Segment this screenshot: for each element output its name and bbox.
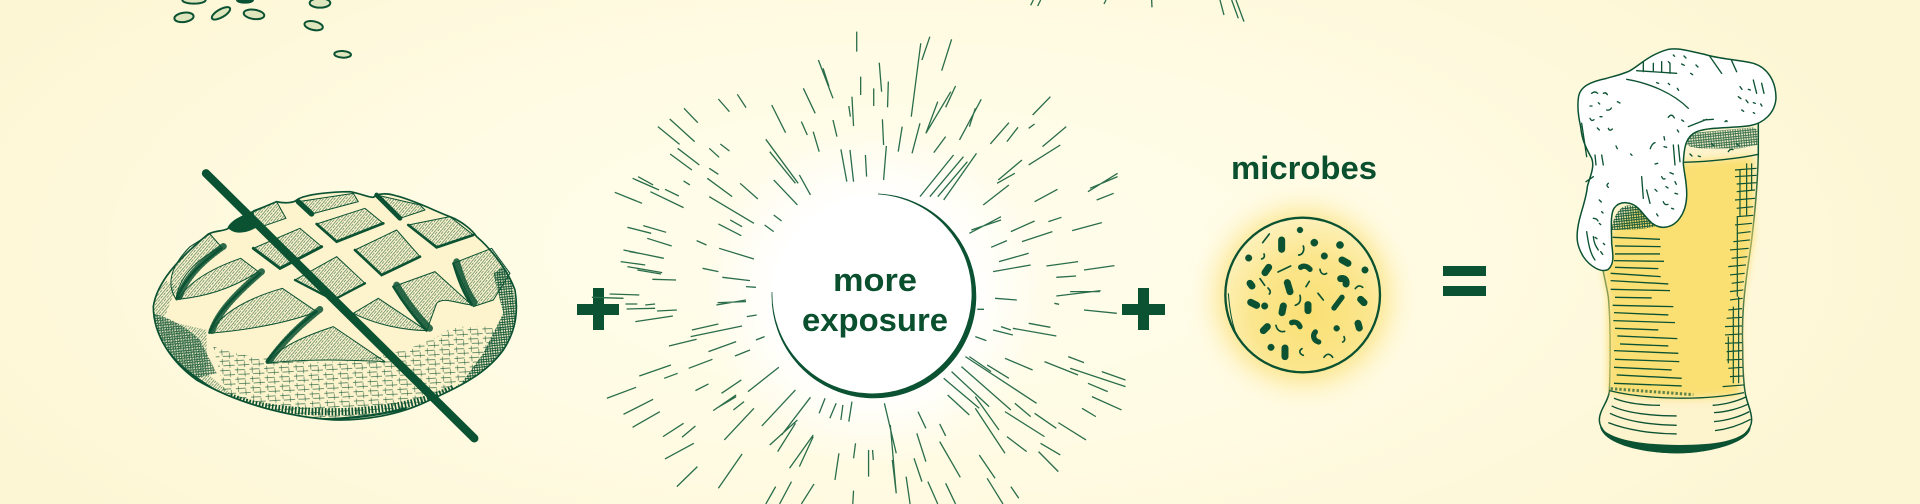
glow behind exposure circle — [704, 126, 1044, 466]
microbe shapes — [1245, 227, 1368, 357]
glass foot shadow — [1600, 427, 1751, 453]
label: more: more — [833, 262, 917, 298]
beer foam — [1577, 49, 1776, 270]
label: exposure: exposure — [802, 302, 948, 338]
right liquid hatch — [1723, 163, 1757, 387]
scored crust panels — [171, 193, 510, 363]
beer liquid — [1603, 157, 1753, 398]
glass body — [1599, 120, 1758, 453]
exposure circle — [772, 194, 976, 398]
glass base lines — [1608, 397, 1751, 434]
loaf shading — [150, 263, 520, 423]
foam cavity hatch — [1612, 205, 1655, 230]
loaf body — [153, 192, 516, 420]
plus sign 2 — [1122, 288, 1165, 330]
upper rim hatch — [1687, 127, 1757, 149]
icon: microbes dish — [1225, 218, 1380, 372]
dark scored edges — [177, 195, 475, 362]
grain seeds — [174, 0, 351, 58]
icon: crossed-out bread loaf — [150, 173, 520, 438]
sunburst rays — [592, 32, 1126, 504]
glow behind microbes dish — [1217, 211, 1389, 383]
slash line — [206, 173, 474, 438]
equals sign — [1443, 266, 1486, 296]
left liquid hatch — [1611, 237, 1682, 386]
heading: microbes: microbes — [1231, 150, 1377, 186]
top rays cut off from previous section — [1031, 0, 1244, 22]
plus sign 1 — [577, 288, 619, 330]
foam detail — [1582, 55, 1764, 260]
icon: beer glass — [1577, 49, 1776, 453]
liquid bottom line — [1609, 391, 1744, 398]
